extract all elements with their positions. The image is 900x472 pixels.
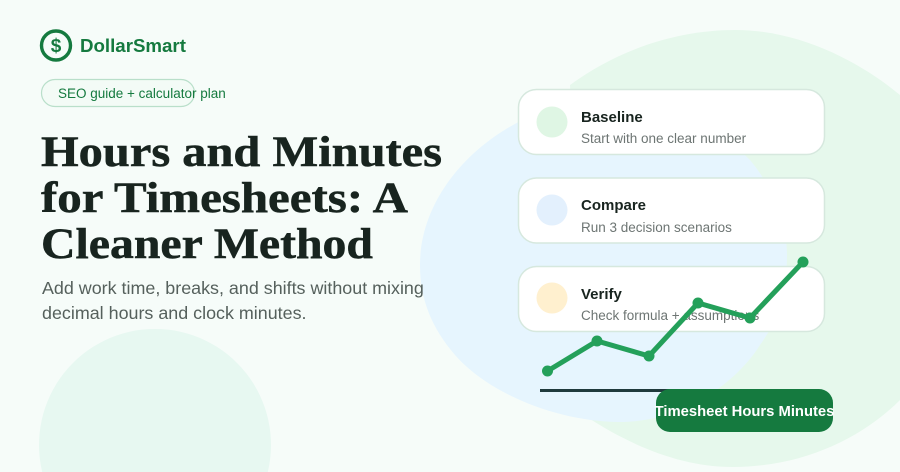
panel: compare card	[518, 178, 824, 243]
chart baseline	[540, 389, 815, 392]
tag pill	[42, 80, 226, 106]
line chart	[542, 256, 808, 376]
icon: dollar coin: $	[51, 36, 62, 57]
subtitle	[42, 278, 424, 323]
background circle: bottom left	[39, 329, 271, 472]
panel: verify card: Check formula + assumptions	[581, 308, 759, 323]
title	[41, 129, 442, 268]
panel: baseline card: Start with one clear number	[581, 131, 747, 146]
panel: compare card: Run 3 decision scenarios	[581, 220, 732, 235]
title: Cleaner Method	[41, 221, 373, 268]
title: Hours and Minutes	[41, 129, 442, 176]
subtitle: decimal hours and clock minutes.	[42, 303, 307, 323]
icon: yellow dot	[536, 282, 568, 314]
icon: green dot	[536, 106, 568, 138]
panel: verify card	[518, 266, 824, 332]
background blob: green	[570, 30, 900, 467]
brand name: DollarSmart	[80, 35, 186, 56]
icon: dollar coin	[42, 31, 70, 60]
button: topic label	[655, 389, 834, 432]
background blob: blue	[420, 103, 787, 422]
logo	[42, 31, 186, 60]
tag pill: SEO guide + calculator plan	[58, 86, 226, 101]
icon: blue dot	[536, 194, 568, 226]
title: for Timesheets: A	[41, 175, 408, 222]
panel: baseline card	[518, 90, 824, 154]
card text: Verify	[581, 286, 623, 303]
button: topic label: Timesheet Hours Minutes	[655, 404, 834, 420]
subtitle: Add work time, breaks, and shifts without mixing	[42, 278, 424, 298]
card text: Compare	[581, 197, 646, 214]
card text: Baseline	[581, 109, 643, 126]
